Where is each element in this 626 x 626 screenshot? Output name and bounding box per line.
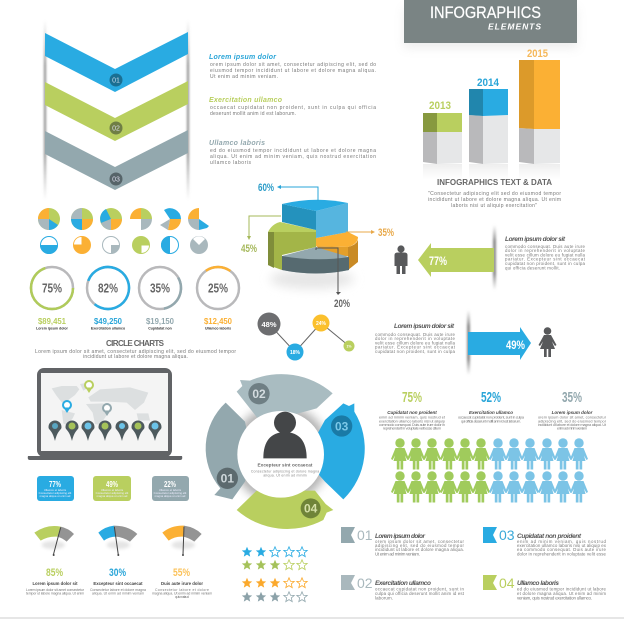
chart: bubble line: 1%	[346, 344, 352, 348]
panel: circle progress charts: 35%	[150, 280, 170, 296]
text block: lorem ipsum left: pariatur. Excepteur sint occaecat	[375, 344, 456, 350]
segment 04	[237, 491, 333, 529]
segment 02	[237, 374, 333, 423]
text: gauge labels: tempor ut labore magna aliqua. Ut enim	[26, 592, 84, 596]
text: gauge labels: quis nostrud	[175, 595, 189, 599]
list item 03: Cupidatat non proident	[517, 533, 582, 540]
list item 02: Exercitation ullamco	[375, 580, 431, 587]
segment 01	[206, 403, 252, 499]
list item 01: incididunt ut labore et dolore magna aliqua.	[375, 547, 464, 552]
segment 04: 04	[304, 502, 318, 516]
text block: lorem ipsum right: Lorem ipsum dolor sit	[505, 236, 566, 243]
text block: circle chart values	[36, 316, 232, 330]
cards: stat percentages: Ullamco et laboris	[44, 488, 67, 492]
stats: percentages with text: incididunt ut labore et dolore magna aliqua. Ut	[538, 423, 607, 427]
cards: stat percentages	[37, 476, 189, 501]
panel: circle progress charts: 75%	[42, 280, 62, 296]
text block: infographics text and data: laboris nisi ut aliquip exercitation"	[451, 203, 537, 209]
charts: gauges	[34, 526, 202, 556]
list item 04: et dolore magna aliqua. Ut enim ad minim	[517, 591, 606, 596]
panel: chevron steps: 01	[112, 78, 120, 84]
cards: stat percentages: 77%	[49, 480, 61, 489]
title banner: INFOGRAPHICS	[430, 4, 541, 22]
chart: 3D pie	[268, 200, 358, 289]
list item 04: 04	[499, 575, 515, 591]
icon: man	[394, 245, 408, 274]
text block: lorem ipsum right: velit esse cillum dolore eu fugiat nulla	[505, 252, 586, 258]
text block: chevron descriptions: Lorem ipsum dolor	[209, 54, 277, 61]
arrow: 77 percent: 77%	[429, 254, 447, 268]
list item 01: 01	[357, 527, 373, 543]
cards: stat percentages: Ullamco et laboris	[159, 488, 182, 492]
gauge 30	[98, 526, 137, 556]
text block: lorem ipsum right: dolor in reprehenderit in voluptate	[505, 248, 586, 253]
panel: chevron steps: 02	[112, 126, 120, 132]
callouts: pie percentages: 20%	[334, 298, 350, 310]
title banner	[404, 0, 577, 48]
cards: stat percentages: Ullamco et laboris	[101, 488, 124, 492]
text: gauge labels	[26, 567, 212, 599]
text: gauge labels: Consectetur labore et dolore magna	[90, 588, 146, 592]
stats: percentages with text: qui officia deserunt mollit anim id est laborum.	[461, 420, 521, 424]
text block: circle chart values: Lorem ipsum dolor	[36, 326, 68, 330]
text block: circle chart values: $19,150	[146, 316, 174, 326]
text block: circle chart values: Cupidatat non	[148, 326, 172, 330]
list item 02: culpa qui officia deserunt mollit anim id est	[375, 591, 465, 596]
callouts: pie percentages: 45%	[241, 243, 257, 255]
chart: bubble line	[258, 312, 354, 360]
center text: aliqua. Ut enim ad minim	[263, 474, 307, 478]
panel: circle progress charts: 25%	[208, 280, 228, 296]
stats: percentages with text: orem ipsum dolor sit amet, consectetur	[538, 416, 607, 420]
cards: stat percentages: Consectetur adipiscing elit	[96, 491, 129, 495]
ratings: star rows	[242, 547, 307, 602]
text block: chevron descriptions: Ut enim ad minim veniam.	[210, 74, 278, 80]
text block: chevron descriptions: Exercitation ullamco	[209, 97, 283, 104]
chart: bubble line: 48%	[261, 320, 277, 329]
callouts: pie percentages: 35%	[378, 227, 394, 239]
cards: stat percentages: Consectetur adipiscing elit	[39, 491, 72, 495]
text block: lorem ipsum left: velit esse cillum dolore eu fugiat nulla	[375, 340, 456, 346]
cards: stat percentages: magna aliqua ut enim ad	[155, 494, 186, 498]
text: gauge labels: 85%	[46, 567, 63, 579]
panel: chevron steps	[44, 20, 189, 200]
text block: infographics text and data: incididunt ut labore et dolore magna aliqua. Ut enim	[428, 197, 561, 203]
stats: percentages with text: exercitation ullamco laboris nisi ut aliquip	[379, 420, 445, 424]
list item 01: orem ipsum dolor sit amet, consectetur	[375, 539, 465, 544]
stats: percentages with text: adipiscing elit, sed do eiusmod tempor	[538, 420, 607, 424]
callouts: pie percentages	[241, 182, 394, 310]
text block: infographics text and data: INFOGRAPHICS TEXT & DATA	[437, 178, 552, 187]
list item 02: laborum.	[375, 596, 393, 600]
text block: circle chart values: $49,250	[94, 316, 122, 326]
stats: percentages with text: 52%	[481, 390, 501, 406]
text block: lorem ipsum left: cupidatat non proident, sunt in culpa	[375, 349, 456, 354]
text block: lorem ipsum right: commodo consequat. Duis aute irure	[505, 244, 586, 249]
text block: lorem ipsum right: qui officia deserunt mollit.	[505, 266, 560, 270]
text block: lorem ipsum right	[505, 236, 586, 270]
text: gauge labels: Excepteur sint occaecat	[93, 581, 143, 586]
text block: lorem ipsum right: cupidatat non proident, sunt in culpa	[505, 261, 586, 266]
list item 01: Ut enim ad minim veniam.	[375, 552, 420, 556]
bar chart: 2013 to 2015	[423, 48, 560, 180]
list item 01	[341, 527, 465, 556]
panel: circle progress charts	[31, 259, 247, 317]
text: gauge labels: Consectetur labore et dolore	[155, 588, 209, 592]
text: gauge labels: 30%	[109, 567, 126, 579]
gauge 55	[162, 526, 202, 556]
list item 03: exercitation ullamco laboris nisi ut aliquip ex	[517, 543, 607, 548]
stats: percentages with text: Cupidatat non proident	[387, 410, 437, 415]
text block: circle chart values: $12,450	[204, 316, 232, 326]
cards: stat percentages: Consectetur adipiscing elit	[154, 491, 187, 495]
text block: circle charts: CIRCLE CHARTS	[106, 339, 165, 348]
list item 03	[483, 527, 607, 556]
text block: circle chart values: Exercitation ullamco	[91, 326, 125, 330]
panel: laptop with map	[28, 368, 182, 460]
panel: chevron steps: 03	[112, 176, 120, 184]
bar chart: 2013 to 2015: 2013	[429, 100, 451, 112]
center text	[251, 463, 319, 478]
icons: fill level circles	[40, 236, 208, 254]
list item 02: occaecat cupidatat non proident, sunt in	[375, 586, 465, 592]
center text: Excepteur sint occaecat	[257, 463, 313, 468]
cards: stat percentages: magna aliqua ut enim ad	[40, 494, 71, 498]
text block: chevron descriptions: ullamco laboris	[210, 160, 252, 166]
text block: circle charts: incididunt ut labore et dolore magna aliqua.	[83, 354, 188, 360]
list item 03: enim ad minim veniam, quis nostrud	[517, 539, 607, 544]
text block: circle chart values: $89,451	[38, 316, 66, 326]
segment 03: 03	[335, 419, 349, 433]
text block: chevron descriptions: Ullamco laboris	[209, 140, 265, 147]
segment 01: 01	[221, 472, 234, 486]
stats: percentages with text: enim ad minim veniam, quis nostrud et	[379, 416, 446, 420]
callouts: pie percentages: 60%	[258, 182, 274, 194]
text block: circle charts	[35, 339, 236, 360]
text block: lorem ipsum left: commodo consequat. Duis aute irure	[375, 332, 456, 337]
list item 04	[483, 575, 607, 600]
icons: green people	[391, 438, 490, 502]
text block: chevron descriptions: eiusmod tempor incididunt ut labore et dolore magna aliqua.	[210, 68, 376, 74]
text: gauge labels: Lorem ipsum dolor sit	[32, 581, 78, 586]
stats: percentages with text	[379, 390, 607, 430]
text: gauge labels: Duis aute irure dolor	[161, 581, 203, 586]
text block: chevron descriptions: ed do eiusmod tempor incididunt ut labore et dolore magna	[210, 148, 376, 154]
bar chart: 2013 to 2015: 2014	[477, 77, 500, 89]
text block: circle charts: Lorem ipsum dolor sit amet, consectetur adipiscing elit, sed do eiusmod tempor	[35, 349, 236, 355]
map	[52, 383, 150, 425]
list item 01: Lorem ipsum dolor	[375, 533, 425, 540]
cards: stat percentages: 49%	[106, 480, 118, 489]
arrow: 77 percent	[418, 225, 496, 290]
segment 03	[318, 403, 365, 499]
stats: percentages with text: occaecat cupidatat non proident, sunt in culpa	[458, 416, 525, 420]
text block: chevron descriptions	[209, 54, 376, 166]
text block: chevron descriptions: aliqua. Ut enim ad minim veniam, quis nostrud exercitation	[210, 154, 376, 160]
text block: lorem ipsum left	[375, 323, 456, 354]
list item 03: dolor in reprehenderit in voluptate velit esse	[517, 552, 607, 556]
arrow: 49 percent: 49%	[506, 338, 525, 352]
arrow: 49 percent	[467, 310, 531, 375]
list item 02: 02	[357, 575, 373, 591]
location pin row	[48, 420, 162, 441]
text block: chevron descriptions: orem ipsum dolor sit amet, consectetur adipiscing elit, sed do	[210, 62, 376, 68]
icons: blue people	[489, 438, 588, 502]
list item 03: 03	[499, 527, 515, 543]
list item 04: Ullamco laboris	[517, 580, 559, 587]
text: gauge labels: Lorem ipsum dolor sit amet consectetur	[26, 588, 85, 592]
stats: percentages with text: enim ad minim veniam	[557, 426, 587, 430]
text block: chevron descriptions: deserunt mollit anim id est laborum.	[210, 111, 296, 117]
gauge 85	[34, 526, 74, 556]
icons: pie chart row	[38, 208, 209, 230]
stats: percentages with text: reprehenderit in voluptate velit esse cillum	[383, 426, 441, 430]
chart: bubble line: 18%	[290, 350, 301, 356]
icon: person	[263, 412, 307, 458]
text: gauge labels: 55%	[173, 567, 190, 579]
list item 04: ed do eiusmod tempor incididunt ut labore	[517, 586, 607, 592]
stats: percentages with text: commodo consequat. Duis aute irure dolor in	[379, 423, 445, 427]
panel: circle progress charts: 82%	[98, 280, 118, 296]
center text: Consectetur adipiscing et dolore magna	[251, 470, 319, 474]
chart: bubble line: 24%	[316, 321, 327, 327]
list item 04: veniam, quis nostrud exercitation ullamco.	[517, 596, 592, 600]
text block: lorem ipsum left: dolor in reprehenderit in voluptate	[375, 336, 456, 341]
text: gauge labels: magna aliqua. Ut enim ad minim veniam	[152, 592, 212, 596]
text: gauge labels: aliqua. Ut enim ad minim veniam	[92, 592, 144, 596]
segment 02: 02	[252, 387, 266, 401]
text block: infographics text and data: "Consectetur adipiscing elit sed do eiusmod tempor	[428, 191, 561, 197]
stats: percentages with text: 75%	[402, 390, 422, 406]
list item 01: adipiscing elit, sed do eiusmod tempor	[375, 543, 465, 548]
cards: stat percentages: magna aliqua ut enim ad	[97, 494, 128, 498]
map pins	[63, 381, 111, 416]
bar chart: 2013 to 2015: 2015	[527, 48, 548, 60]
cards: stat percentages: 22%	[164, 480, 176, 489]
title banner: ELEMENTS	[488, 22, 541, 32]
chart: circular segments with person	[206, 374, 365, 529]
text block: chevron descriptions: occaecat cupidatat non proident, sunt in culpa qui officia	[210, 105, 376, 111]
stats: percentages with text: 35%	[562, 390, 582, 406]
text block: lorem ipsum right: pariatur. Excepteur sint occaecat	[505, 256, 586, 262]
icon: woman	[538, 327, 556, 357]
list item 03: ea commodo consequat. Duis aute irure	[517, 547, 607, 552]
text block: circle chart values: Ullamco laboris	[205, 326, 231, 330]
text block: infographics text and data	[428, 178, 561, 209]
stats: percentages with text: Exercitation ullamco	[469, 410, 513, 415]
text block: lorem ipsum left: Lorem ipsum dolor sit	[394, 323, 455, 330]
list item 02	[341, 575, 465, 600]
stats: percentages with text: Lorem ipsum dolor	[552, 410, 593, 415]
